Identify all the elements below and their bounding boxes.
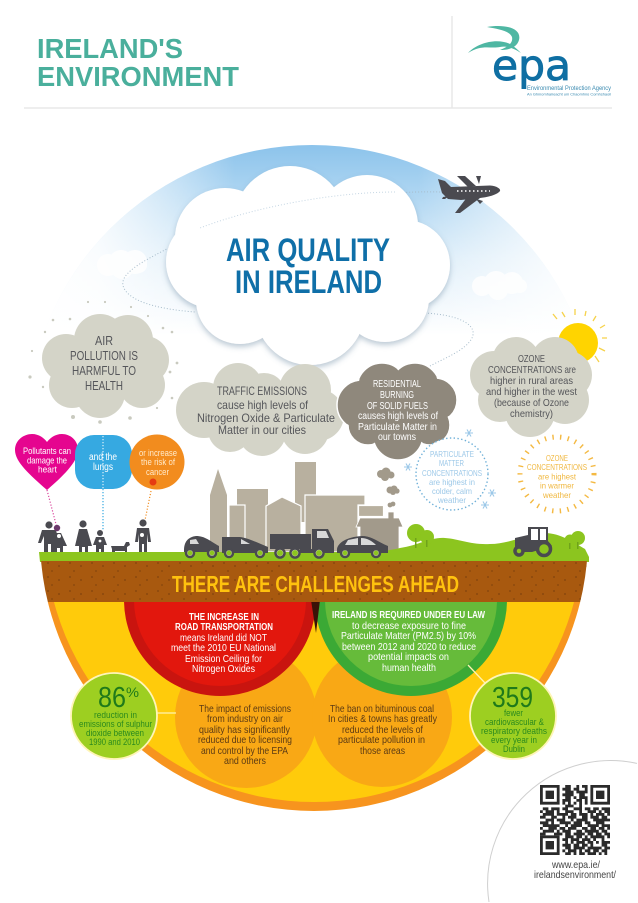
- panel: ozone cloud: and higher in the west: [486, 386, 577, 398]
- panel: road transportation text: means Ireland did NOT: [180, 632, 267, 644]
- panel: air pollution cloud: POLLUTION IS: [70, 348, 138, 363]
- balloon: heart: damage the: [27, 456, 67, 466]
- logo: EPA: [468, 26, 611, 96]
- balloon: cancer: cancer: [146, 467, 169, 477]
- URL text: www.epa.ie/: [551, 859, 600, 871]
- balloon: cancer: [130, 434, 184, 490]
- stat: 86 percent: reduction in: [94, 710, 137, 721]
- title cloud: [166, 166, 450, 365]
- icon: sun: [553, 309, 607, 363]
- panel: EU law text: to decrease exposure to fine: [352, 620, 466, 632]
- skyline buildings: [210, 462, 384, 552]
- stat: 86 percent: 1990 and 2010: [89, 737, 140, 748]
- logo: EPA: epa: [492, 41, 571, 90]
- balloon strings: [47, 489, 151, 530]
- balloon: heart: Pollutants can: [23, 446, 71, 456]
- stat: 86 percent: [71, 673, 157, 759]
- panel: ozone cloud: [470, 337, 592, 437]
- sky dome: [78, 145, 553, 318]
- balloon: heart: [15, 434, 78, 490]
- panel: industry emissions text: from industry on air: [207, 713, 283, 725]
- panel: residential burning cloud: OF SOLID FUELS: [367, 401, 428, 412]
- balloon: lungs: and the: [89, 452, 117, 463]
- panel: residential burning cloud: BURNING: [380, 390, 414, 401]
- panel: road transportation text: [171, 611, 276, 675]
- title text: AIR QUALITY: [226, 232, 390, 268]
- house with chimney smoke: [356, 468, 403, 552]
- panel: EU law text: between 2012 and 2020 to reduce: [342, 641, 476, 653]
- balloon: heart: heart: [38, 464, 57, 474]
- icon: aeroplane: [438, 176, 500, 213]
- ground and soil: [30, 533, 600, 602]
- panel: industry emissions text: quality has significantly: [199, 724, 291, 736]
- small background clouds: [97, 250, 527, 300]
- heading: challenges: THERE ARE CHALLENGES AHEAD: [172, 571, 459, 597]
- stat: 86 percent: emissions of sulphur: [79, 719, 152, 730]
- panel: particulate matter dotted circle: are highest in: [429, 477, 475, 487]
- panel: traffic emissions cloud: Nitrogen Oxide & Particulate: [197, 411, 335, 425]
- panel: EU law text: [332, 609, 485, 674]
- panel: traffic emissions cloud: cause high levels of: [217, 398, 309, 412]
- panel: industry emissions text: [198, 703, 292, 767]
- panel: ozone sun-ray circle: weather: [542, 490, 571, 500]
- panel: bituminous coal text: reduced the levels of: [342, 724, 423, 736]
- panel: bituminous coal text: [328, 703, 438, 757]
- vehicles: [184, 529, 388, 558]
- panel: ozone cloud: chemistry): [510, 408, 553, 420]
- panel: road transportation text: meet the 2010 EU National: [171, 642, 276, 654]
- QR code: [540, 785, 610, 855]
- panel: bituminous coal text: those areas: [360, 745, 405, 757]
- panel: road transportation text: THE INCREASE IN: [189, 611, 259, 623]
- flight path: [123, 192, 473, 366]
- panel: residential burning cloud: our towns: [378, 432, 416, 443]
- panel: residential burning cloud: causes high levels of: [358, 411, 438, 422]
- panel: particulate matter dotted circle: MATTER: [439, 458, 464, 468]
- panel: EU law text: IRELAND IS REQUIRED UNDER EU LAW: [332, 609, 485, 621]
- panel: ozone sun-ray circle: [520, 437, 594, 511]
- logo: EPA: An Ghníomhaireacht um Chaomhnú Comhshaoil: [527, 92, 611, 96]
- panel: industry emissions text: and others: [224, 755, 266, 767]
- stat: 359 fewer deaths: every year in: [491, 735, 537, 746]
- panel: residential burning cloud: RESIDENTIAL: [373, 379, 421, 390]
- logo: EPA: Environmental Protection Agency: [527, 86, 611, 92]
- panel: ozone sun-ray circle: CONCENTRATIONS: [527, 462, 587, 472]
- panel: ozone cloud: (because of Ozone: [494, 397, 569, 409]
- panel: ozone sun-ray circle: OZONE: [546, 453, 568, 463]
- panel: ozone cloud: OZONE: [518, 353, 545, 365]
- stat: 359 fewer deaths: 359: [492, 682, 533, 714]
- panel: particulate matter dotted circle: weather: [437, 495, 466, 505]
- panel: traffic emissions cloud: [176, 363, 344, 456]
- balloon: lungs: lungs: [93, 462, 113, 473]
- panel: residential burning cloud: Particulate Matter in: [358, 422, 437, 433]
- panel: ozone sun-ray circle: are highest: [538, 472, 577, 482]
- decorative dots around pollution cloud: [28, 301, 178, 424]
- trees: [407, 524, 585, 549]
- panel: industry emissions text: The impact of emissions: [199, 703, 291, 715]
- stat: 359 fewer deaths: respiratory deaths: [481, 726, 547, 737]
- panel: road transportation text: ROAD TRANSPORTATION: [175, 621, 273, 633]
- stat: 86 percent: %: [126, 684, 139, 700]
- stat: 86 percent: 86: [98, 682, 126, 714]
- panel: EU law text: potential impacts on: [368, 651, 449, 663]
- panel: EU law text: human health: [382, 662, 436, 674]
- panel: traffic emissions cloud: TRAFFIC EMISSIONS: [217, 384, 307, 398]
- balloon: cancer: or increase: [139, 448, 177, 458]
- title text: [226, 232, 390, 300]
- header: publication title: ENVIRONMENT: [37, 61, 239, 92]
- title text: IN IRELAND: [235, 264, 382, 300]
- panel: industry emissions text: reduced due to licensing: [198, 734, 292, 746]
- balloon: cancer: the risk of: [141, 457, 175, 467]
- panel: industry emissions text: and control by the EPA: [201, 745, 288, 757]
- panel: air pollution cloud: [42, 314, 169, 418]
- orange circles: [175, 662, 452, 788]
- stat: 359 fewer deaths: fewer: [504, 708, 523, 719]
- corner arc: [488, 761, 637, 902]
- stat: 86 percent: dioxide between: [86, 728, 144, 739]
- panel: ozone cloud: CONCENTRATIONS are: [488, 364, 576, 376]
- panel: bituminous coal text: The ban on bituminous coal: [330, 703, 434, 715]
- stat: 359 fewer deaths: Dublin: [503, 744, 525, 755]
- panel: particulate matter dotted circle: colder, calm: [432, 486, 472, 496]
- URL text: [534, 859, 616, 881]
- panel: traffic emissions cloud: Matter in our cities: [218, 423, 306, 437]
- header: publication title: IRELAND'S: [37, 33, 183, 64]
- challenges bowl: [48, 602, 580, 811]
- panel: EU law text: Particulate Matter (PM2.5) by 10%: [341, 630, 476, 642]
- panel: bituminous coal text: particulate pollution in: [338, 734, 425, 746]
- panel: air pollution cloud: HARMFUL TO: [72, 363, 136, 378]
- panel: road transportation text: Nitrogen Oxides: [192, 663, 255, 675]
- panel: air pollution cloud: AIR: [95, 333, 113, 348]
- panel: ozone cloud: higher in rural areas: [490, 375, 573, 387]
- panel: ozone sun-ray circle: in warmer: [540, 480, 574, 490]
- header: publication title: [37, 33, 239, 92]
- panel: bituminous coal text: In cities & towns has greatly: [328, 713, 438, 725]
- stat: 359 fewer deaths: cardiovascular &: [485, 717, 545, 728]
- icon: tractor: [515, 527, 552, 556]
- panel: particulate matter dotted circle: [404, 430, 496, 510]
- balloon: lungs: [75, 435, 132, 489]
- panel: road transportation text: Emission Ceiling for: [185, 653, 262, 665]
- panel: particulate matter dotted circle: PARTICULATE: [430, 449, 474, 459]
- panel: air pollution cloud: HEALTH: [85, 378, 123, 393]
- people and dog: [38, 519, 151, 556]
- URL text: irelandsenvironment/: [534, 869, 616, 881]
- panel: residential burning cloud: [337, 363, 457, 460]
- stat: 359 fewer deaths: [470, 673, 556, 759]
- panel: particulate matter dotted circle: CONCENTRATIONS: [422, 468, 482, 478]
